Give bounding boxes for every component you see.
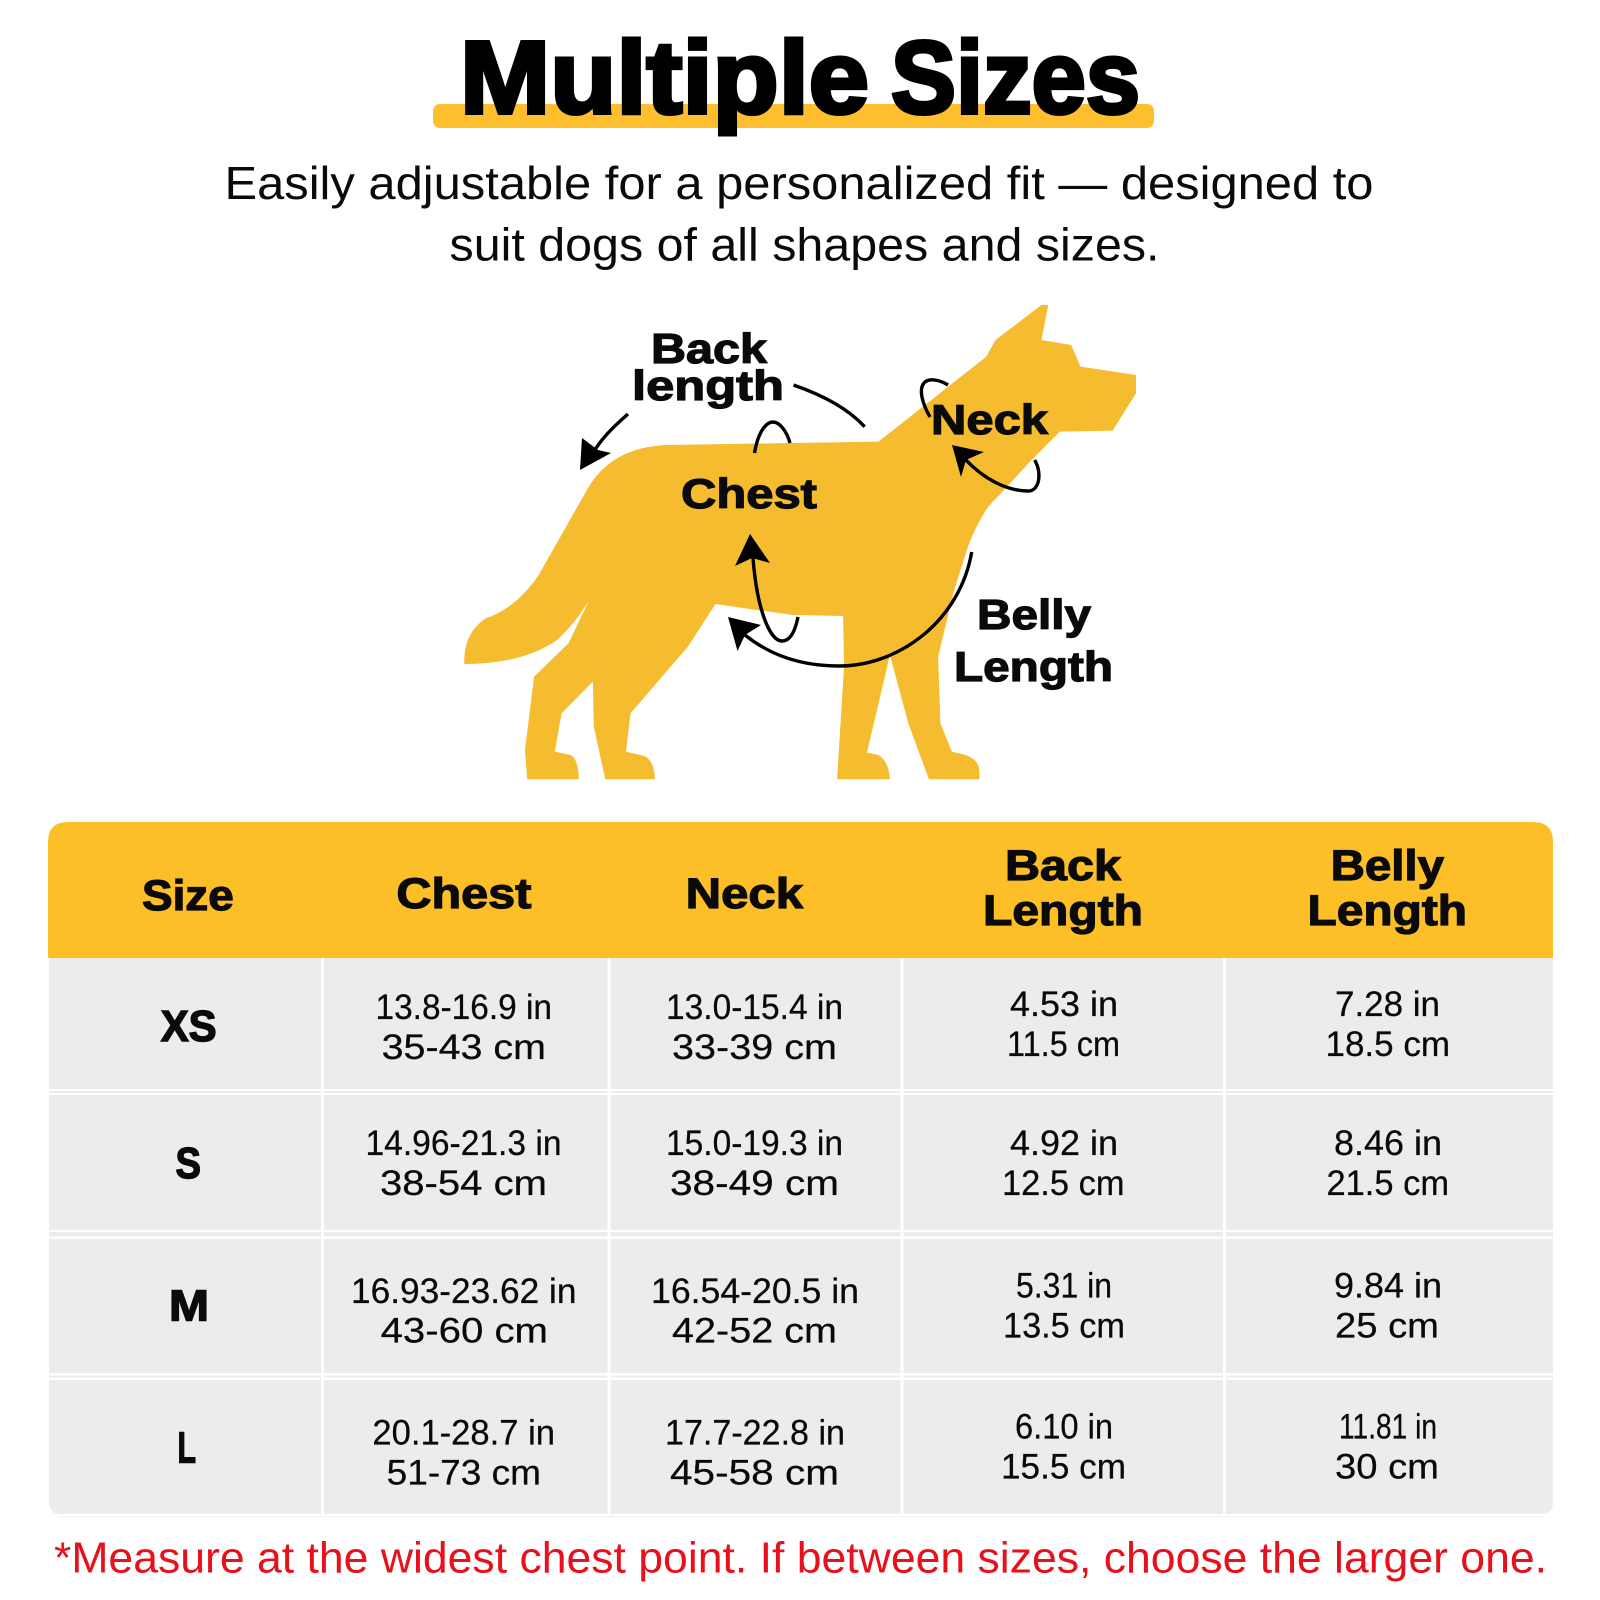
subtitle: suit dogs of all shapes and sizes. [450,218,1160,270]
row XS [161,985,1450,1067]
label: belly length: Length [954,643,1113,690]
arrow: neck [921,380,1039,491]
L neck: 17.7-22.8 in [665,1414,845,1453]
M belly length [1334,1267,1442,1346]
size XS: XS [161,1002,217,1051]
size S: S [176,1139,201,1188]
label: neck: Neck [931,396,1049,443]
L neck [665,1414,845,1492]
XS back length: 11.5 cm [1007,1025,1120,1064]
M back length: 5.31 in [1016,1267,1112,1306]
S neck: 38-49 cm [670,1164,839,1203]
M neck: 42-52 cm [672,1312,837,1351]
row S [176,1124,1449,1203]
XS back length: 4.53 in [1010,985,1118,1024]
L chest [372,1414,555,1492]
arrow: belly length [728,552,972,666]
L back length [1001,1407,1126,1487]
L back length: 15.5 cm [1001,1448,1126,1487]
XS neck: 13.0-15.4 in [666,988,843,1027]
header: size: Size [142,872,234,920]
L neck: 45-58 cm [670,1454,839,1492]
title: Multiple Sizes [460,20,1140,135]
arrow: chest [735,422,798,641]
header: neck: Neck [686,870,803,918]
row M [169,1267,1442,1351]
S neck: 15.0-19.3 in [666,1124,843,1163]
L back length: 6.10 in [1015,1407,1113,1446]
L belly length: 30 cm [1335,1448,1439,1487]
header: belly length [1308,842,1467,935]
XS belly length [1326,985,1450,1064]
size L: L [178,1424,196,1472]
header background [48,822,1553,958]
title underline bar [433,104,1154,128]
L belly length [1335,1407,1439,1487]
header: chest: Chest [396,870,531,918]
M neck [651,1272,859,1351]
XS back length [1007,985,1120,1064]
XS chest: 35-43 cm [382,1028,546,1067]
L belly length: 11.81 in [1339,1407,1437,1446]
M belly length: 9.84 in [1334,1267,1442,1306]
label: back length: length [632,362,784,409]
size table [48,822,1553,1517]
XS neck [666,988,843,1067]
label: belly length: Belly [977,591,1092,638]
arrow: back length [580,385,865,470]
table header row [48,822,1553,958]
title: Multiple Sizes: Sizes [891,20,1140,135]
M chest: 16.93-23.62 in [351,1272,576,1311]
S chest: 14.96-21.3 in [366,1124,562,1163]
table body background [49,958,1553,1517]
footnote: *Measure at the widest chest point. If between sizes, choose the larger one. [54,1534,1547,1582]
size M: M [169,1282,209,1331]
subtitle: Easily adjustable for a personalized fit — designed to [224,157,1374,209]
M belly length: 25 cm [1335,1307,1439,1346]
M neck: 16.54-20.5 in [651,1272,859,1311]
S chest [366,1124,562,1203]
S back length: 12.5 cm [1002,1164,1124,1203]
label: back length: Back [651,325,768,372]
S back length: 4.92 in [1010,1124,1118,1163]
header: back length: Back [1005,842,1121,890]
dog silhouette [464,305,1136,779]
header: belly length: Belly [1331,842,1444,890]
S belly length: 21.5 cm [1326,1164,1449,1203]
L chest: 51-73 cm [387,1454,541,1492]
subtitle [224,157,1374,270]
header: back length [983,842,1143,935]
label: belly length [954,591,1113,690]
M back length: 13.5 cm [1003,1307,1125,1346]
M chest [351,1272,576,1351]
XS belly length: 7.28 in [1335,985,1440,1024]
measurement diagram [464,305,1136,779]
M chest: 43-60 cm [381,1312,548,1351]
S belly length: 8.46 in [1334,1124,1442,1163]
S belly length [1326,1124,1449,1203]
title with underline [433,20,1154,135]
XS neck: 33-39 cm [672,1028,837,1067]
XS belly length: 18.5 cm [1326,1025,1450,1064]
row L [178,1407,1439,1492]
M back length [1003,1267,1125,1346]
S chest: 38-54 cm [380,1164,547,1203]
label: back length [632,325,784,409]
S neck [666,1124,843,1203]
header: back length: Length [983,887,1143,935]
XS chest [376,988,552,1067]
header: belly length: Length [1308,887,1467,935]
L chest: 20.1-28.7 in [372,1414,555,1453]
XS chest: 13.8-16.9 in [376,988,552,1027]
label: chest: Chest [681,470,817,517]
title: Multiple Sizes: Multiple [460,20,869,135]
S back length [1002,1124,1124,1203]
